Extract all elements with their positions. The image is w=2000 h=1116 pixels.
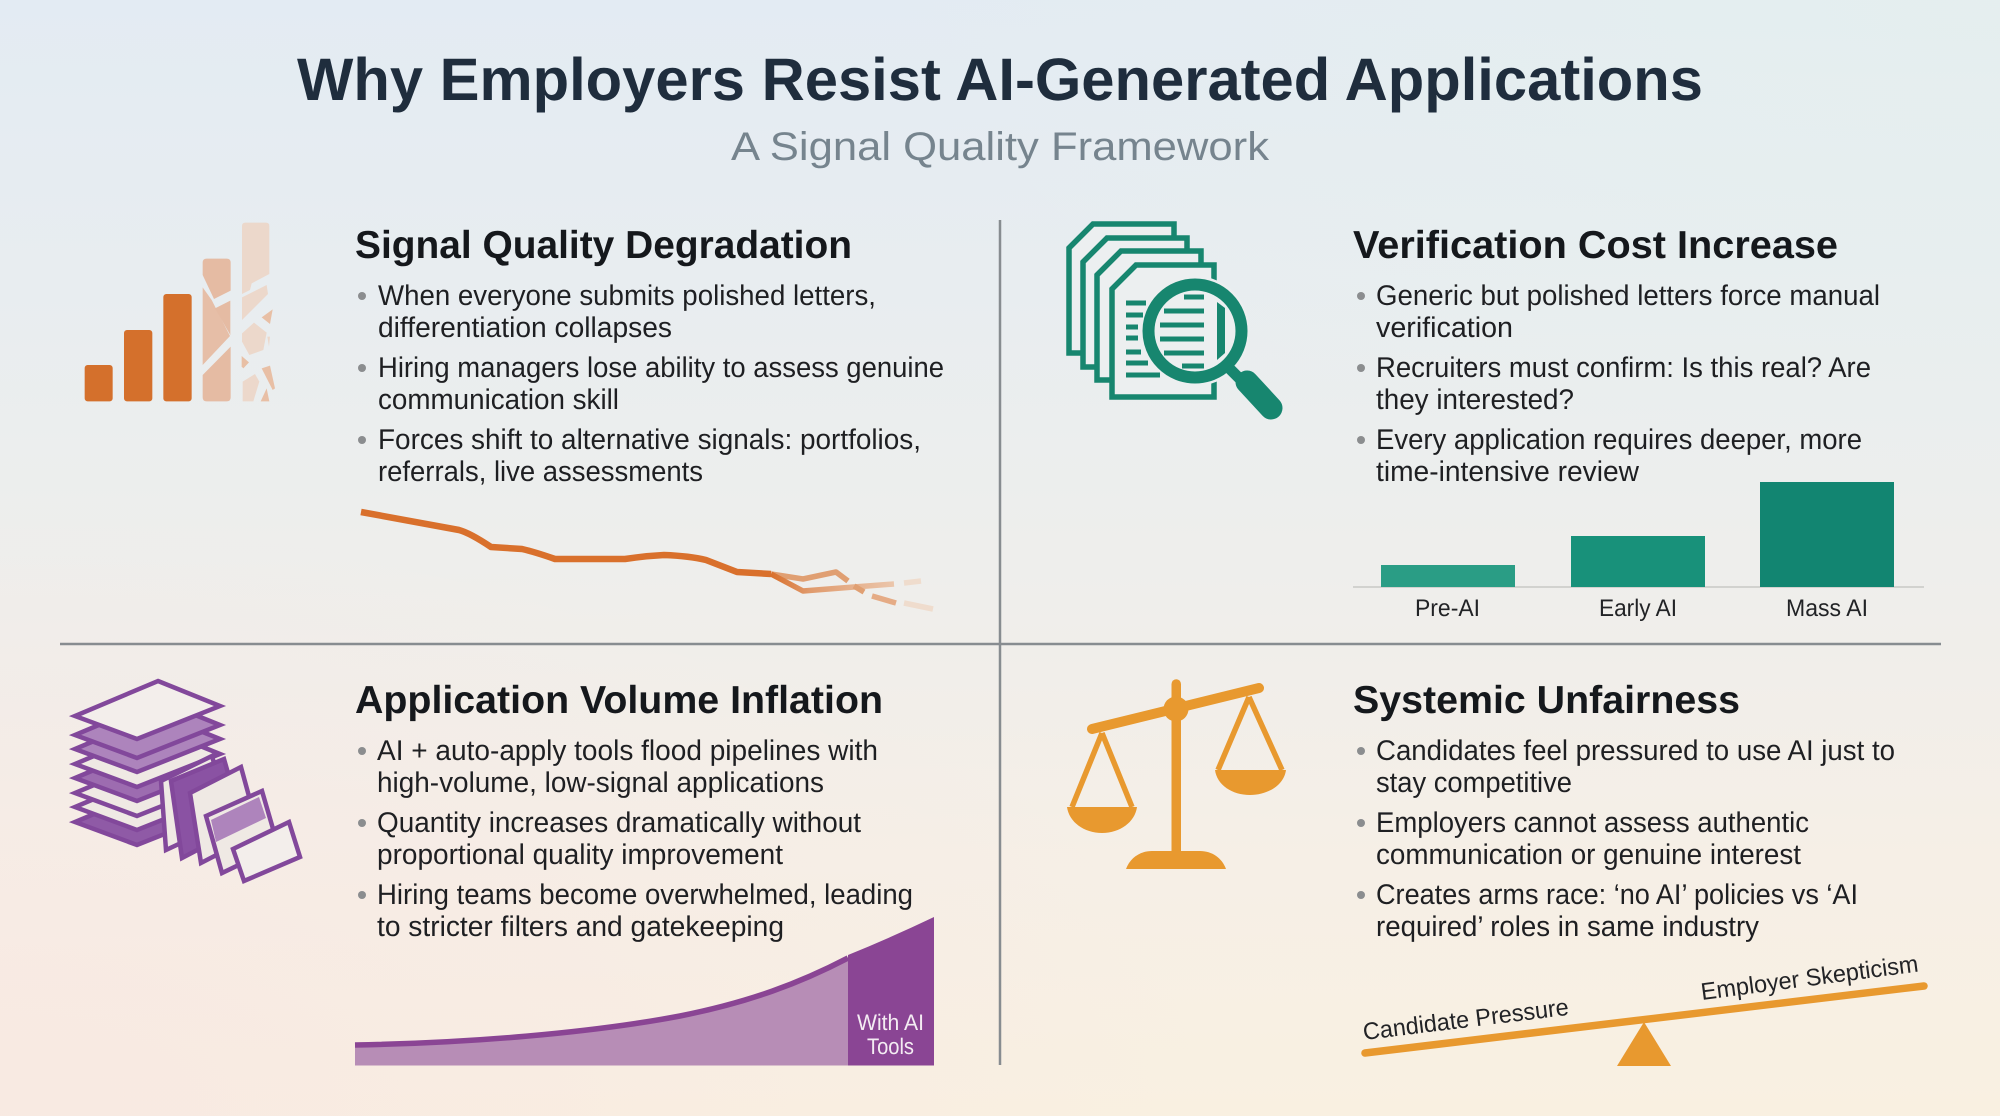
label: employer skepticism: Employer Skepticism bbox=[1699, 951, 1920, 1006]
flying pages bbox=[161, 756, 300, 881]
bullet 3 bbox=[358, 424, 921, 488]
axis labels: Pre-AI bbox=[1415, 595, 1480, 622]
bullet 1: Candidates feel pressured to use AI just to bbox=[1376, 735, 1895, 767]
bullet 3: Creates arms race: ‘no AI’ policies vs ‘AI bbox=[1376, 879, 1858, 911]
subtitle: A Signal Quality Framework bbox=[731, 125, 1270, 169]
bullet 3 bbox=[1357, 879, 1858, 943]
bullet list bbox=[1357, 280, 1880, 488]
area label: Tools bbox=[867, 1034, 914, 1059]
bullet 2: Hiring managers lose ability to assess genuine bbox=[378, 352, 944, 384]
bullet 1: verification bbox=[1376, 312, 1513, 344]
bullet 3 bbox=[1357, 424, 1862, 488]
bullet 3 bbox=[358, 879, 913, 943]
bar: Early AI bbox=[1571, 536, 1705, 587]
bullet 1: differentiation collapses bbox=[378, 312, 672, 344]
bullet 2 bbox=[358, 352, 944, 416]
vertical divider bbox=[999, 220, 1001, 1065]
area: with AI tools bbox=[848, 917, 934, 1066]
document stack bbox=[1069, 224, 1214, 397]
area chart: application volume bbox=[355, 917, 934, 1066]
bullet 3: referrals, live assessments bbox=[378, 456, 703, 488]
icon: balance scale bbox=[1067, 679, 1286, 869]
bullet 1 bbox=[358, 280, 876, 344]
heading: Verification Cost Increase bbox=[1353, 224, 1838, 267]
bullet 2: Recruiters must confirm: Is this real? Are bbox=[1376, 352, 1871, 384]
bullet 1: stay competitive bbox=[1376, 767, 1572, 799]
bullet 1: AI + auto-apply tools flood pipelines with bbox=[377, 735, 878, 767]
area label bbox=[857, 1010, 924, 1059]
bullet 1 bbox=[1357, 280, 1880, 344]
bullet 3: Hiring teams become overwhelmed, leading bbox=[377, 879, 913, 911]
bullet 3: Forces shift to alternative signals: portfolios, bbox=[378, 424, 921, 456]
panel: verification cost increase bbox=[1069, 224, 1924, 622]
area label: With AI bbox=[857, 1010, 924, 1035]
bullet 2 bbox=[358, 807, 861, 871]
area: before AI bbox=[355, 958, 848, 1066]
heading: Systemic Unfairness bbox=[1353, 679, 1740, 722]
bullet 2: communication skill bbox=[378, 384, 619, 416]
bullet list bbox=[1357, 735, 1895, 943]
heading: Application Volume Inflation bbox=[355, 679, 883, 722]
bullet 2: they interested? bbox=[1376, 384, 1574, 416]
bullet 3: required’ roles in same industry bbox=[1376, 911, 1760, 943]
bullet 2: Quantity increases dramatically without bbox=[377, 807, 861, 839]
magnifier bbox=[1148, 284, 1271, 408]
bullet 2 bbox=[1357, 352, 1871, 416]
bullet 1: high-volume, low-signal applications bbox=[377, 767, 824, 799]
bar chart: verification cost bbox=[1353, 482, 1924, 622]
icon: fracturing bar chart bbox=[85, 223, 275, 401]
bullet 2: proportional quality improvement bbox=[377, 839, 783, 871]
fulcrum bbox=[1617, 1022, 1671, 1066]
horizontal divider bbox=[60, 643, 1941, 645]
bullet 1: When everyone submits polished letters, bbox=[378, 280, 876, 312]
panel: systemic unfairness bbox=[1067, 679, 1924, 1066]
label: candidate pressure: Candidate Pressure bbox=[1361, 994, 1570, 1046]
bullet 1 bbox=[1357, 735, 1895, 799]
stacked sheets bbox=[75, 681, 220, 845]
bullet 2: communication or genuine interest bbox=[1376, 839, 1801, 871]
bullet list bbox=[358, 280, 944, 488]
panel: signal quality degradation bbox=[85, 223, 944, 609]
icon: documents under magnifier bbox=[1069, 224, 1271, 408]
bullet 2: Employers cannot assess authentic bbox=[1376, 807, 1809, 839]
seesaw diagram bbox=[1361, 951, 1924, 1066]
heading: Signal Quality Degradation bbox=[355, 224, 852, 267]
bullet 3: to stricter filters and gatekeeping bbox=[377, 911, 784, 943]
line chart: fragmenting decline bbox=[361, 512, 933, 609]
icon: paper stack and flying pages bbox=[75, 681, 300, 881]
title: Why Employers Resist AI-Generated Applications bbox=[297, 46, 1703, 113]
bullet list bbox=[358, 735, 913, 943]
bullet 3: Every application requires deeper, more bbox=[1376, 424, 1862, 456]
document lines bbox=[1126, 297, 1204, 375]
axis labels bbox=[1415, 595, 1868, 622]
panel: application volume inflation bbox=[75, 679, 934, 1066]
seesaw beam bbox=[1365, 986, 1924, 1053]
axis labels: Mass AI bbox=[1786, 595, 1868, 622]
bullet 2 bbox=[1357, 807, 1809, 871]
bullet 1 bbox=[358, 735, 878, 799]
bullet 1: Generic but polished letters force manual bbox=[1376, 280, 1880, 312]
axis labels: Early AI bbox=[1599, 595, 1677, 622]
bullet 3: time-intensive review bbox=[1376, 456, 1639, 488]
bar: Pre-AI bbox=[1381, 565, 1515, 587]
bar: Mass AI bbox=[1760, 482, 1894, 587]
curve stroke bbox=[355, 958, 848, 1045]
